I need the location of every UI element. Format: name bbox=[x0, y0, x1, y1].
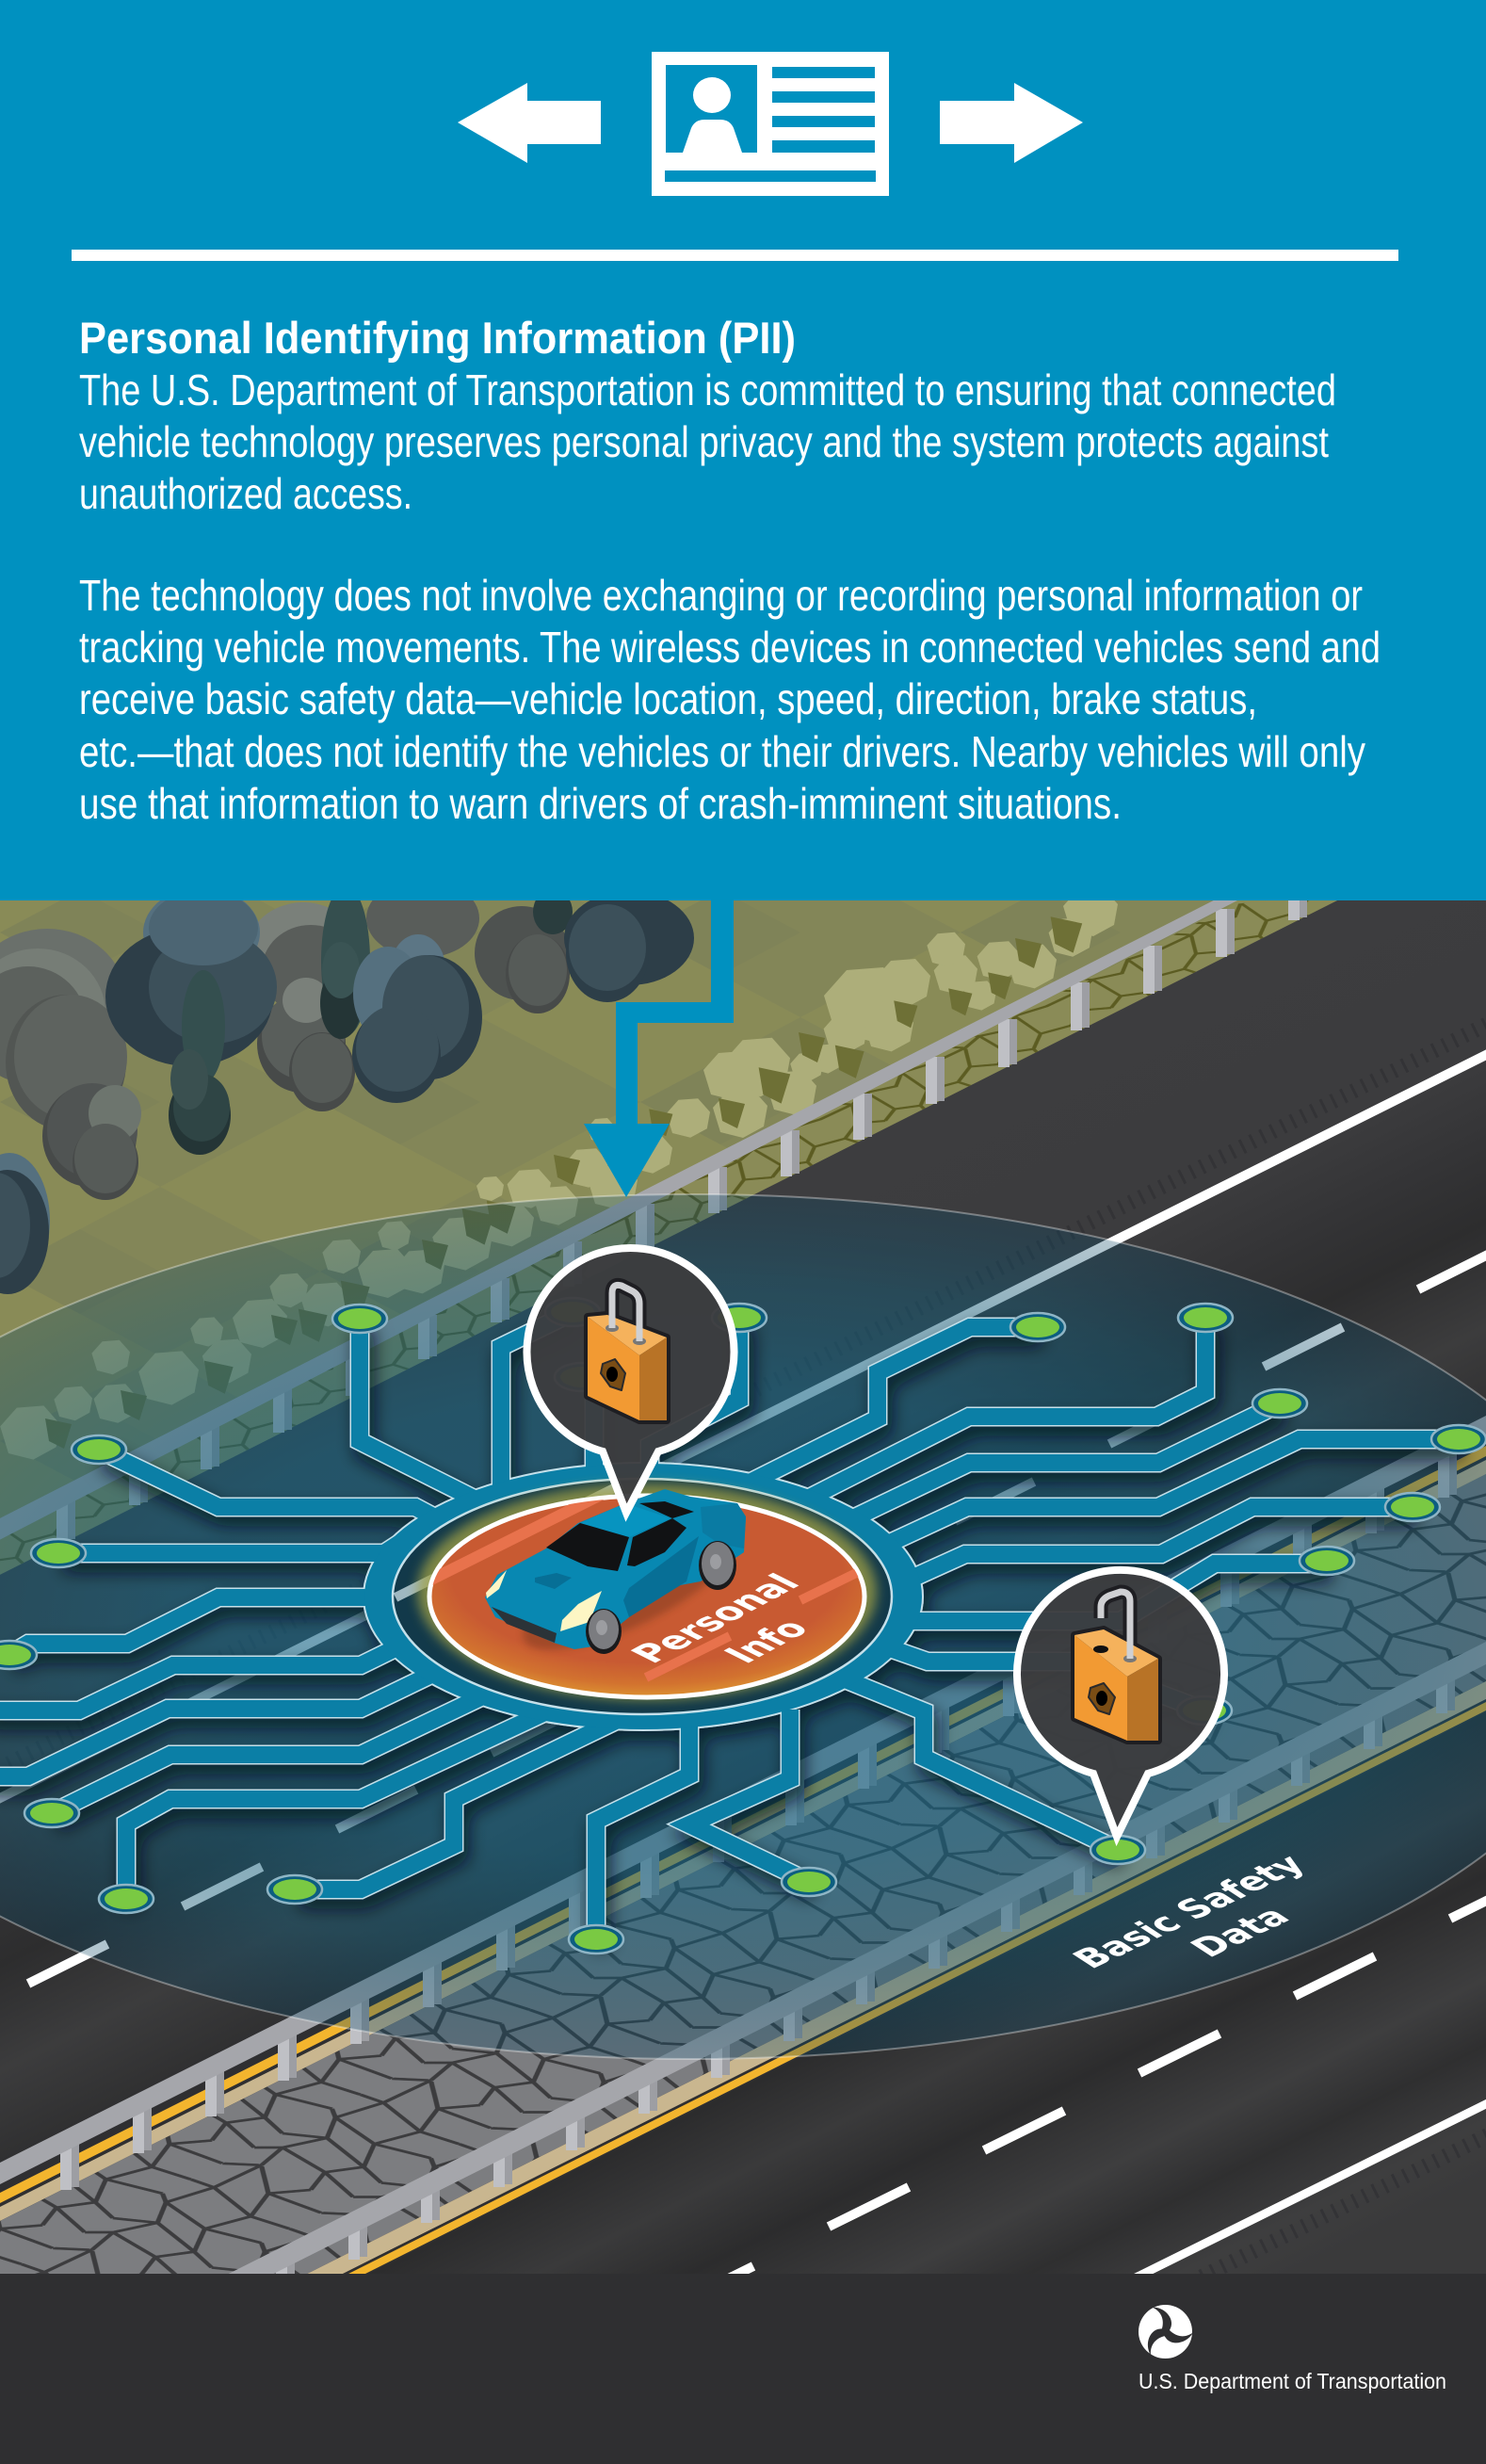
bushes bbox=[0, 887, 1118, 1460]
orange disc bbox=[429, 1496, 864, 1697]
lower road markings bbox=[673, 1879, 1486, 2317]
guardrail posts bbox=[62, 872, 1453, 2296]
median bbox=[0, 1426, 1486, 2464]
divider rule bbox=[72, 250, 1398, 261]
cracked soil strip bbox=[0, 891, 1356, 1584]
connector arrow bbox=[584, 900, 734, 1197]
ID card icon bbox=[652, 52, 889, 196]
arrow: left bbox=[458, 83, 601, 163]
callout: open padlock bbox=[1017, 1570, 1224, 1837]
open padlock icon bbox=[1074, 1592, 1158, 1741]
label: Personal Info: Info bbox=[715, 1614, 818, 1668]
car bbox=[485, 1489, 746, 1654]
trace fills bbox=[0, 1312, 1459, 1939]
heading: Personal Identifying Information (PII) bbox=[79, 313, 796, 363]
footer bbox=[0, 2274, 1486, 2464]
label: Basic Safety Data: Basic Safety bbox=[1063, 1848, 1315, 1974]
upper road markings bbox=[0, 1014, 1486, 1984]
grass field bbox=[0, 895, 1486, 1648]
guardrails bbox=[0, 885, 1486, 2421]
endpoint nodes bbox=[0, 1298, 1486, 1953]
translucent basic safety data disc bbox=[0, 1194, 1486, 2059]
upper roadway bbox=[0, 891, 1486, 2204]
agency name: U.S. Department of Transportation bbox=[1139, 2369, 1446, 2393]
label: Personal Info: Personal bbox=[622, 1568, 810, 1668]
paragraph one bbox=[79, 365, 1336, 518]
paragraph two bbox=[79, 571, 1381, 828]
label: Basic Safety Data: Data bbox=[1181, 1901, 1299, 1963]
lane lines on disc bbox=[433, 1499, 859, 1682]
lower roadway bbox=[0, 1702, 1486, 2464]
olive glow bbox=[417, 1483, 877, 1700]
white lane line across ring bbox=[396, 1484, 622, 1597]
header panel bbox=[0, 0, 1486, 900]
arrow: right bbox=[940, 83, 1083, 163]
circuit network bbox=[0, 1298, 1486, 1953]
closed padlock icon bbox=[588, 1285, 667, 1420]
car shadow bbox=[509, 1512, 744, 1672]
callout: closed padlock bbox=[526, 1248, 735, 1513]
trace outlines bbox=[0, 1312, 1459, 1939]
scene: highway background bbox=[0, 872, 1486, 2464]
paragraph two: use that information to warn drivers of crash-imminent situations. bbox=[79, 779, 1122, 828]
paragraph two: receive basic safety data—vehicle location, speed, direction, brake status, bbox=[79, 674, 1257, 723]
personal info hub bbox=[428, 1489, 866, 1699]
inner ring bbox=[393, 1479, 892, 1714]
DOT logo bbox=[1139, 2305, 1193, 2359]
paragraph one: unauthorized access. bbox=[79, 469, 412, 518]
trees bbox=[0, 879, 694, 1294]
